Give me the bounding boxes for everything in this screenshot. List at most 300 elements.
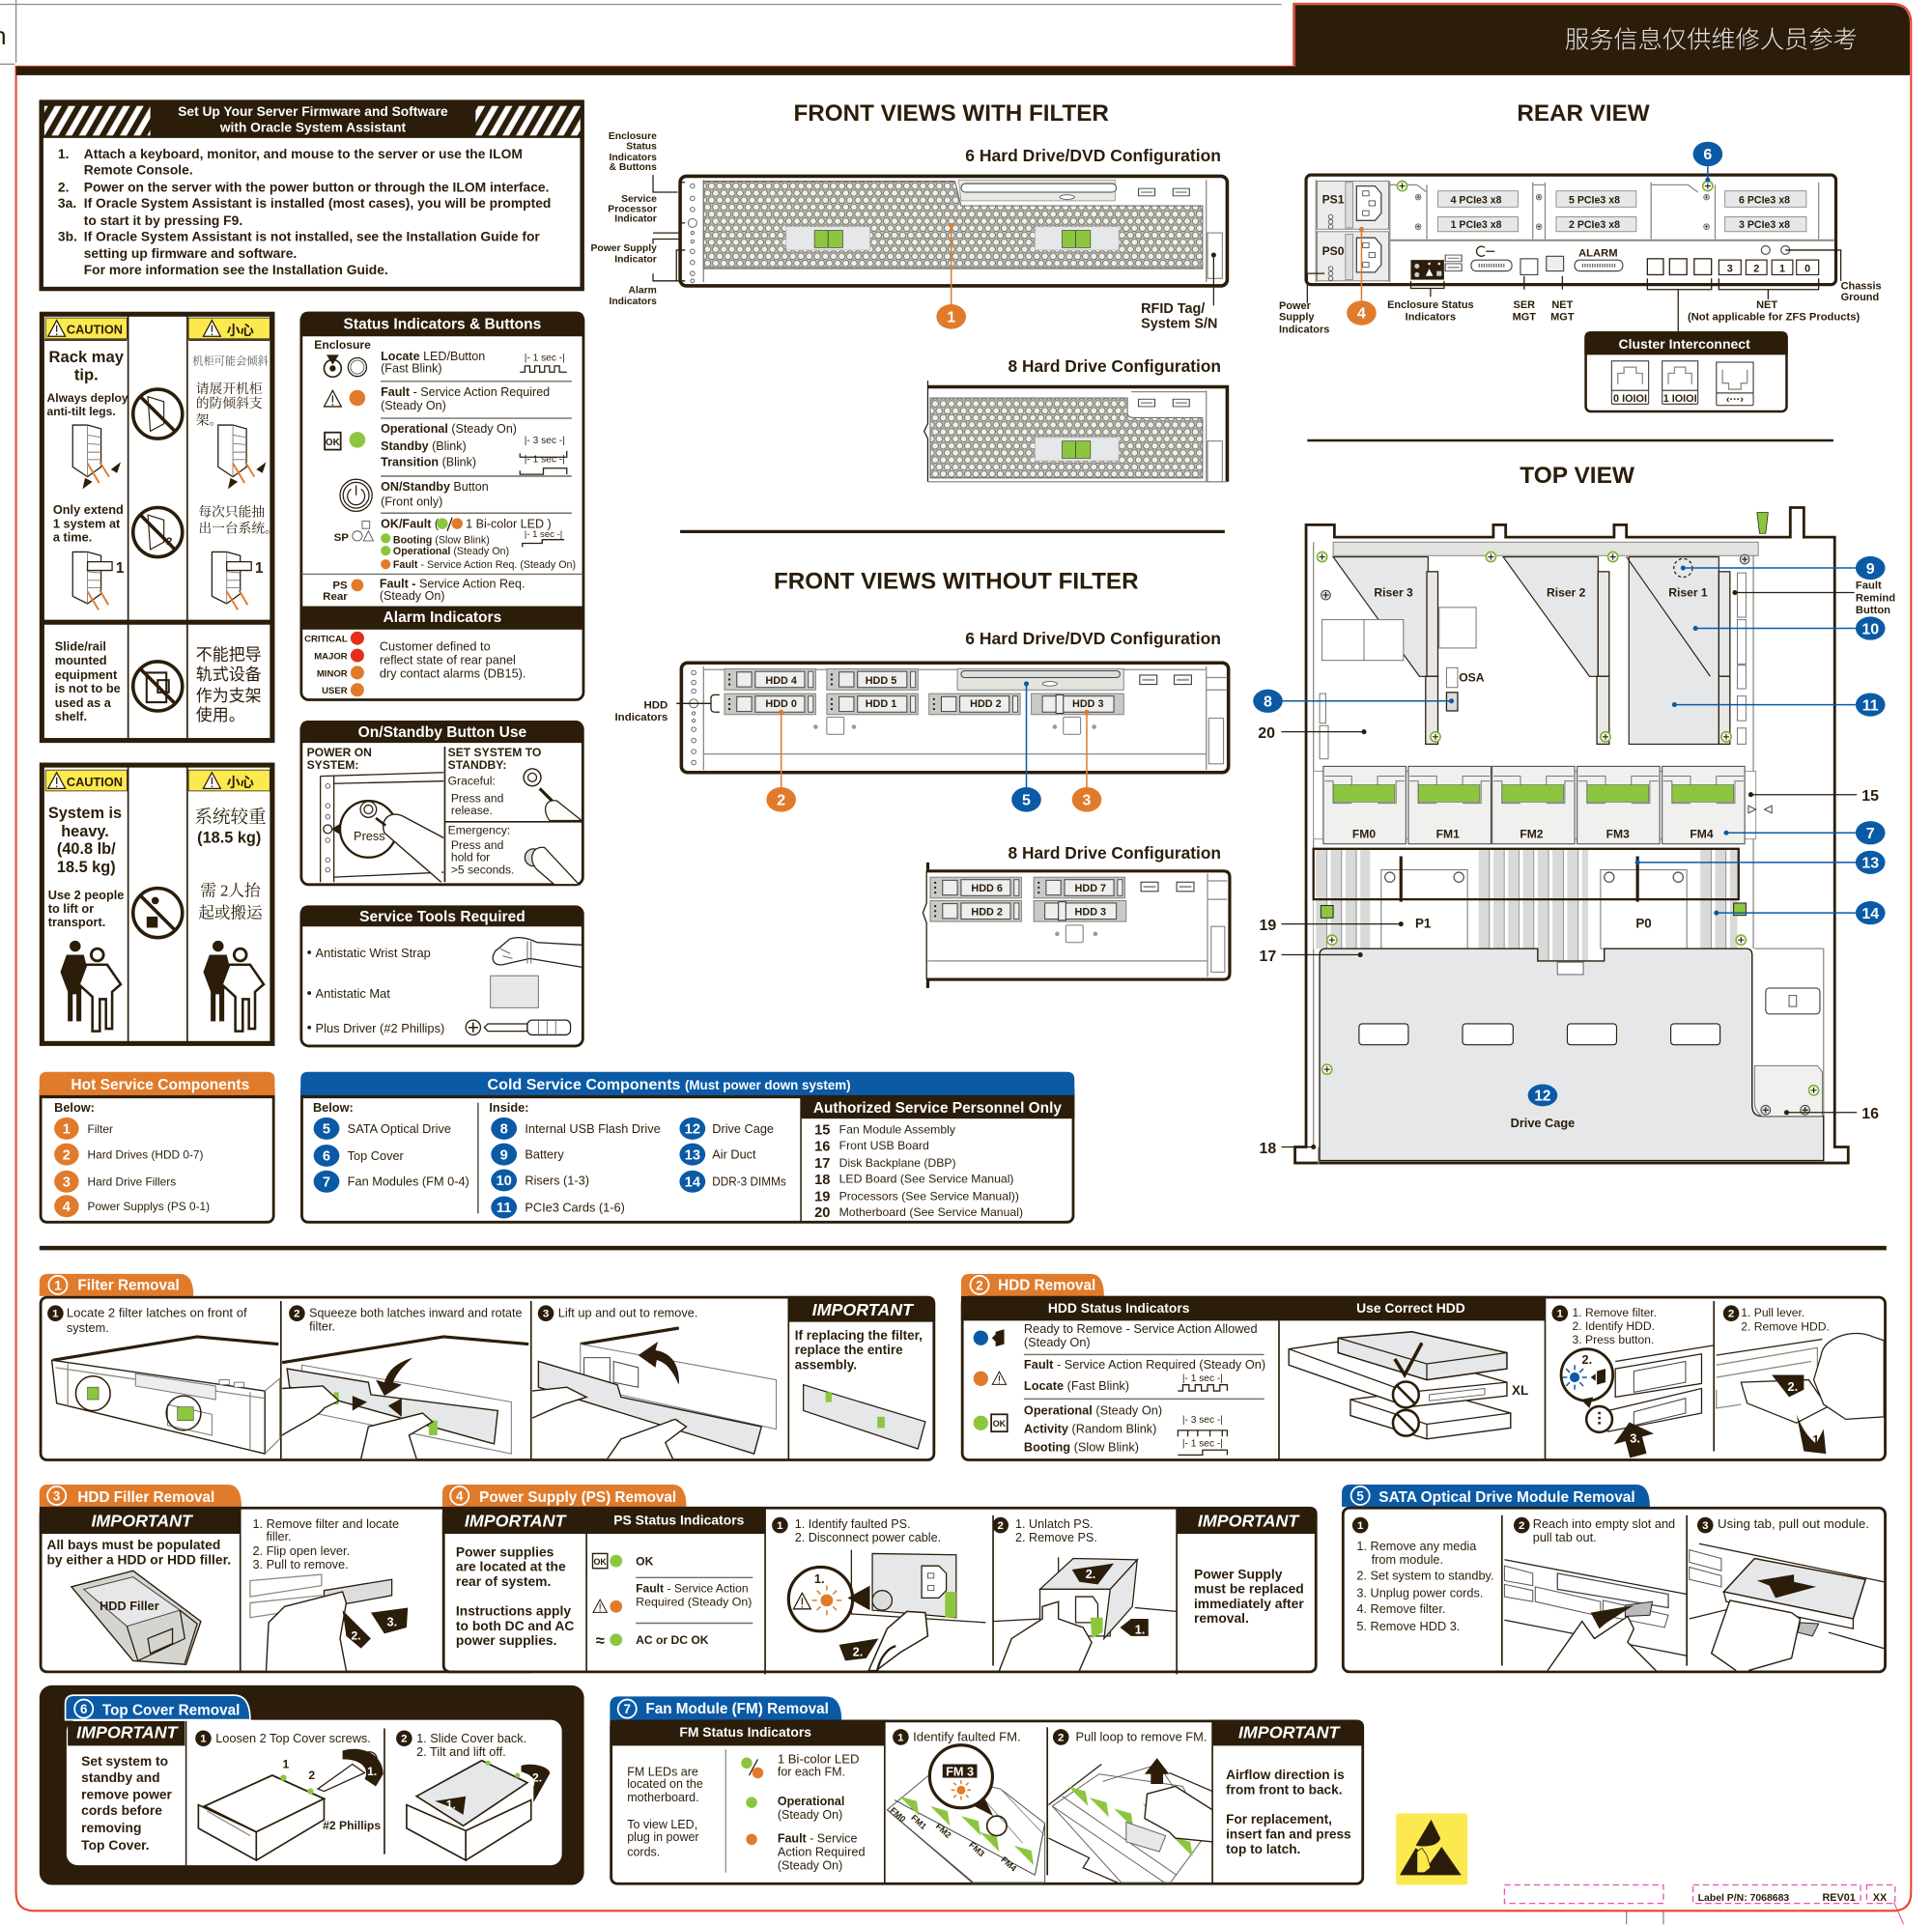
rear io ports: ALARM (1578, 247, 1618, 259)
panel: power supply removal: 1 (777, 1520, 783, 1532)
panel: caution rack tip: used as a (55, 695, 112, 710)
panel: hdd removal: Operational (Steady On) (1024, 1402, 1162, 1417)
panel: hdd filler removal: 3 (53, 1489, 60, 1504)
panel: caution rack tip: Rack may (49, 348, 125, 366)
pcie slots: 6 PCIe3 x8 (1739, 194, 1790, 206)
diagram: front view without filter 6 drive: 5 (1022, 793, 1031, 809)
labels: front panel callouts: Processor (608, 204, 657, 214)
panel: status indicators and buttons: 1 Bi-color LED ) (466, 517, 552, 530)
illustration: faulted fan led: FM4 (999, 1854, 1018, 1873)
panel: fan module removal (610, 1696, 1364, 1883)
panel: hot service components: Hard Drive Fillers (88, 1175, 176, 1189)
panel: hdd removal: |- 3 sec -| (1182, 1415, 1223, 1426)
panel: fan module removal: insert fan and press (1226, 1826, 1351, 1841)
panel: cold service components: 5 (323, 1121, 330, 1137)
panel: on/standby button use: hold for (451, 851, 490, 864)
panel: cold service components: Risers (1-3) (525, 1173, 589, 1187)
panel: filter removal: assembly. (795, 1357, 857, 1372)
panel: status indicators and buttons: Standby (Blink) (381, 439, 467, 453)
illustration: pull filler: 2. (352, 1629, 361, 1643)
panel: sata optical drive removal: Reach into empty slot and (1533, 1516, 1675, 1531)
panel: filter removal: IMPORTANT (812, 1300, 915, 1319)
diagram: front view without filter 8 drive: HDD 3 (1075, 907, 1106, 919)
heading: rear view: REAR VIEW (1517, 100, 1650, 127)
illustration: faulted fan led: FM1 (909, 1813, 928, 1831)
panel: status indicators and buttons: Enclosure (314, 338, 371, 352)
label part number boxes: REV01 (1822, 1892, 1856, 1904)
illustration: loosen top cover screws: 2 (308, 1769, 315, 1782)
illustration: faulted fan led: FM0 (889, 1805, 908, 1824)
panel: setup server firmware: If Oracle System Assistant is installed (most cases), you will be prompted (84, 195, 551, 211)
panel: caution heavy: 需 2人抬 (200, 881, 261, 899)
label: fault remind button: Button (1856, 605, 1890, 616)
diagram: front view without filter 6 drive: 3 (1083, 793, 1092, 809)
illustration: hdd filler tray (71, 1571, 201, 1664)
panel: hdd filler removal: HDD Filler Removal (77, 1489, 214, 1506)
panel: top cover removal: 2. Tilt and lift off. (416, 1744, 506, 1759)
panel: cold service components: 13 (685, 1147, 700, 1163)
labels: rear view callouts: MGT (1513, 312, 1536, 324)
diagram: front view without filter 6 drive: HDD 3 (1072, 698, 1104, 710)
callout badges: top view: 13 (1861, 856, 1879, 872)
illustration: slide cover back: 1. (446, 1798, 456, 1811)
panel: power supply removal: 2. Disconnect power cable. (795, 1531, 941, 1544)
panel: top cover removal (40, 1685, 584, 1885)
panel: filter removal: If replacing the filter, (795, 1328, 923, 1343)
illustration: remove ps: 1. (1135, 1622, 1145, 1636)
panel: caution heavy: (40.8 lb/ (57, 840, 116, 858)
diagram: top view chassis: OSA (1459, 670, 1485, 684)
risers: Riser 1 (1668, 585, 1708, 599)
illustration: identify hdd and pull lever: 1. (1812, 1432, 1823, 1447)
panel: fan module removal: Fault - Service (778, 1831, 858, 1845)
panel: cold service components: 6 (323, 1149, 330, 1165)
panel: top cover removal: remove power (81, 1787, 173, 1802)
panel: fan module removal: motherboard. (627, 1791, 699, 1804)
panel: caution rack tip: mounted (55, 653, 107, 667)
panel: power supply removal: Power Supply (PS) Removal (479, 1489, 676, 1506)
panel: setup server firmware: 1. (58, 146, 69, 161)
panel: fan module removal: For replacement, (1226, 1812, 1332, 1826)
callout badges: top view: 16 (1861, 1106, 1879, 1122)
panel: power supply removal: rear of system. (456, 1573, 551, 1589)
labels: rear view callouts: (Not applicable for ZFS Products) (1688, 312, 1860, 324)
panel: setup server firmware: 2. (58, 179, 69, 194)
panel: sata optical drive removal: 1 (1357, 1520, 1364, 1532)
panel: top cover removal: Top Cover Removal (102, 1703, 240, 1719)
pcie slots: 4 PCIe3 x8 (1451, 194, 1502, 206)
panel: hot service components (40, 1072, 274, 1222)
panel: caution rack tip: 不能把导 (196, 646, 262, 665)
rear io ports: 1 (1779, 263, 1785, 274)
panel: hdd filler removal: by either a HDD or HDD filler. (46, 1551, 231, 1567)
rear io ports: 3 (1727, 263, 1733, 274)
panel: status indicators and buttons: Transition (Blink) (381, 456, 476, 469)
fan modules: FM2 (1520, 827, 1544, 840)
panel: cold service components: Air Duct (712, 1147, 756, 1162)
icon: esd warning (1396, 1814, 1467, 1885)
panel: power supply removal: OK (636, 1554, 654, 1568)
illustration: identify hdd and pull lever: 2. (1788, 1379, 1798, 1394)
panel: hdd removal: 1. Pull lever. (1741, 1306, 1804, 1319)
labels: front panel callouts: & Buttons (610, 162, 657, 173)
panel: top cover removal: Loosen 2 Top Cover screws. (215, 1731, 371, 1745)
panel: top cover removal: 1. Slide Cover back. (416, 1731, 526, 1745)
risers (1333, 557, 1730, 744)
panel: setup server firmware: For more information see the Installation Guide. (84, 262, 388, 277)
illustration: pull loop (1048, 1758, 1212, 1883)
panel: hdd removal: 2 (976, 1278, 983, 1292)
illustration: pull tab (1504, 1560, 1687, 1671)
panel: hot service components: Hard Drives (HDD 0-7) (88, 1148, 204, 1162)
panel: caution rack tip: CAUTION (67, 323, 123, 337)
power supplies: PS0 (1322, 244, 1345, 258)
panel: on/standby button use: Press and (451, 838, 503, 852)
panel: hdd removal: Use Correct HDD (1356, 1300, 1465, 1316)
rear io ports: 0 (1804, 263, 1810, 274)
illustration: loosen top cover screws (198, 1749, 384, 1860)
panel: top cover removal: IMPORTANT (76, 1723, 180, 1742)
panel: power supply removal: Required (Steady On) (636, 1595, 752, 1608)
power supplies: PS1 (1322, 192, 1345, 206)
panel: status indicators and buttons: |- 1 sec -| (525, 454, 565, 465)
panel: filter removal: Lift up and out to remove. (558, 1306, 697, 1320)
panel: fan module removal: located on the (627, 1777, 703, 1791)
illustration: pull out module (1690, 1543, 1884, 1671)
panel: sata optical drive removal: 2 (1519, 1520, 1524, 1532)
panel: caution rack tip: 小心 (227, 323, 254, 338)
illustration: loosen top cover screws: 1 (283, 1757, 290, 1770)
diagram: front view without filter 6 drive (676, 663, 1229, 812)
panel: top cover removal: removing (81, 1820, 141, 1835)
pcie slots: 3 PCIe3 x8 (1739, 219, 1790, 231)
panel: cold service components: LED Board (See Service Manual) (839, 1172, 1014, 1185)
panel: power supply removal: OK (593, 1557, 607, 1567)
fan modules: FM3 (1606, 827, 1630, 840)
rear io ports: 2 (1753, 263, 1759, 274)
fan modules (1314, 766, 1772, 844)
label part number boxes: XX (1873, 1892, 1888, 1904)
panel: caution heavy: 系统较重 (195, 807, 266, 827)
panel: power supply removal: ≈ (596, 1631, 605, 1650)
panel: hdd filler removal: 1. Remove filter and locate (252, 1516, 399, 1531)
panel: status indicators and buttons: Fault - Service Action Req. (Steady On) (393, 559, 576, 571)
panel: caution heavy: to lift or (48, 901, 94, 916)
panel: fan module removal: 2 (1058, 1732, 1064, 1743)
callout badges: top view: 18 (1260, 1141, 1276, 1157)
panel: hdd removal (961, 1274, 1886, 1461)
panel: hot service components: 1 (63, 1121, 71, 1137)
panel: sata optical drive removal (1342, 1485, 1886, 1672)
panel: cold service components: Internal USB Flash Drive (525, 1121, 661, 1136)
panel: status indicators and buttons: USER (322, 686, 348, 696)
labels: front panel callouts (591, 131, 657, 307)
labels: rear view callouts: NET (1551, 299, 1574, 311)
panel: cold service components: 12 (685, 1121, 700, 1137)
panel: fan module removal: IMPORTANT (1238, 1723, 1341, 1742)
panel: hdd removal: 2. Identify HDD. (1573, 1319, 1655, 1333)
illustration: loosen top cover screws: 1. (367, 1765, 377, 1778)
panel: status indicators and buttons: |- 1 sec -| (525, 529, 562, 540)
pcie slots (1390, 182, 1819, 239)
labels: rear view callouts: Chassis (1841, 281, 1882, 293)
panel: power supply removal: PS Status Indicators (613, 1512, 745, 1527)
panel: status indicators and buttons: Alarm Indicators (384, 609, 502, 626)
panel: caution rack tip: shelf. (55, 709, 87, 723)
panel: cold service components: 11 (497, 1201, 511, 1216)
panel: sata optical drive removal: pull tab out. (1533, 1530, 1597, 1544)
header text: service personnel only: 服务信息仅供维修人员参考 (1565, 27, 1858, 54)
diagram: front view without filter 6 drive: HDD 0 (765, 698, 797, 710)
panel: hot service components: Filter (88, 1122, 113, 1136)
panel: filter removal (40, 1274, 935, 1459)
panel: cold service components: Motherboard (See Service Manual) (839, 1205, 1023, 1219)
illustration: step 2 squeeze latches (282, 1337, 528, 1458)
panel: cold service components: 9 (500, 1147, 508, 1163)
panel: sata optical drive removal: 5. Remove HDD 3. (1356, 1619, 1460, 1633)
illustration: slide cover back: 2. (532, 1770, 542, 1784)
panel: status indicators and buttons: PS (332, 580, 348, 592)
panel: hot service components: Hot Service Components (71, 1077, 250, 1093)
panel: caution heavy: (18.5 kg) (197, 829, 261, 846)
panel: on/standby button use: Graceful: (448, 775, 496, 788)
panel: setup server firmware: 3b. (58, 228, 77, 243)
panel: top cover removal: Set system to (81, 1753, 168, 1769)
panel: power supply removal: IMPORTANT (465, 1511, 567, 1530)
panel: fan module removal: Operational (778, 1795, 844, 1808)
panel: hdd removal: Locate (Fast Blink) (1024, 1378, 1129, 1393)
panel: fan module removal: from front to back. (1226, 1783, 1342, 1798)
panel: fan module removal: cords. (627, 1845, 660, 1858)
illustration: remove ps: 2. (1086, 1567, 1095, 1581)
illustration: faulted ps and cable: 2. (853, 1644, 863, 1658)
panel: top cover removal: cords before (81, 1802, 162, 1818)
motherboard components (1320, 573, 1746, 759)
callout leaders (1282, 565, 1857, 1149)
panel: cold service components: 20 (814, 1205, 830, 1221)
panel: fan module removal: top to latch. (1226, 1842, 1300, 1856)
labels: rear view callouts: Power (1279, 300, 1312, 312)
panel: caution rack tip: 架。 (196, 411, 222, 427)
illustration: identify hdd and pull lever: 3. (1630, 1431, 1640, 1446)
panel: hdd filler removal: filler. (267, 1529, 292, 1543)
panel: cold service components: Fan Module Assembly (839, 1122, 956, 1136)
panel: caution rack tip: 机柜可能会倾斜 (192, 354, 269, 368)
panel: fan module removal: (Steady On) (778, 1858, 842, 1872)
panel: status indicators and buttons: Fault - Service Action Required (381, 385, 550, 399)
illustration: remove ps (993, 1557, 1177, 1671)
panel: caution heavy: 18.5 kg) (57, 859, 116, 876)
panel: on/standby button use: Emergency: (448, 824, 510, 837)
panel: hdd filler removal: 3. Pull to remove. (252, 1557, 349, 1571)
panel: on/standby button use: On/Standby Button Use (358, 724, 526, 741)
label part number boxes: Label P/N: 7068683 (1698, 1893, 1789, 1904)
panel: caution rack tip: Always deploy (46, 391, 128, 405)
panel: cold service components: 8 (500, 1121, 508, 1137)
panel: fan module removal: plug in power (627, 1830, 699, 1844)
panel: status indicators and buttons: MINOR (317, 668, 348, 679)
panel: cold service components: Front USB Board (839, 1139, 929, 1152)
panel: setup server firmware: Remote Console. (84, 161, 193, 177)
panel: cold service components: 10 (497, 1174, 512, 1189)
panel: sata optical drive removal: 3 (1702, 1520, 1709, 1532)
illustration: step 3 lift filter (532, 1328, 925, 1458)
panel: status indicators and buttons: (Steady On) (380, 589, 445, 603)
panel: cold service components: Battery (525, 1147, 564, 1162)
panel: status indicators and buttons: |- 1 sec -| (525, 354, 565, 364)
diagram: front view with filter 6 drive (653, 175, 1227, 329)
panel: caution heavy: CAUTION (67, 775, 123, 789)
heading: top view: TOP VIEW (1520, 463, 1635, 489)
callout badges: top view: 14 (1861, 906, 1879, 922)
panel: cold service components: Drive Cage (712, 1121, 774, 1136)
panel: caution rack tip: 请展开机柜 (196, 381, 263, 396)
panel: caution rack tip: tip. (74, 366, 99, 384)
panel: cold service components: Inside: (489, 1100, 528, 1115)
panel: power supply removal: must be replaced (1194, 1581, 1304, 1597)
labels: front panel callouts: Enclosure (609, 131, 657, 142)
panel: service tools required: Service Tools Required (359, 909, 526, 925)
panel: hdd removal: Ready to Remove - Service Action Allowed (1024, 1321, 1258, 1336)
diagram: front view with filter 6 drive: 1 (947, 310, 955, 326)
panel: cluster interconnect: 1 IOIOI (1663, 393, 1697, 405)
panel: cold service components: 15 (814, 1123, 830, 1139)
fan modules: FM4 (1690, 827, 1714, 840)
risers: Riser 3 (1374, 585, 1413, 599)
panel: on/standby button use: POWER ON (307, 746, 372, 759)
panel: top cover removal: 2 (401, 1734, 408, 1745)
panel: cold service components: PCIe3 Cards (1-6) (525, 1200, 625, 1214)
panel: power supply removal: 1. Unlatch PS. (1015, 1517, 1094, 1531)
panel: caution heavy: System is (48, 805, 122, 822)
screws (1318, 552, 1819, 1115)
panel: service tools required (300, 906, 582, 1046)
rear io ports: 6 (1703, 147, 1712, 163)
panel: status indicators and buttons: |- 3 sec -| (525, 436, 565, 446)
callout badges: top view: 17 (1260, 948, 1276, 965)
labels: rear view callouts: Indicators (1406, 312, 1456, 324)
pcie slots: 5 PCIe3 x8 (1569, 194, 1620, 206)
illustration: loosen top cover screws: #2 Phillips (323, 1819, 381, 1832)
callout badges: top view: 20 (1258, 725, 1275, 742)
panel: caution heavy: transport. (48, 915, 105, 929)
panel: power supply removal: are located at the (456, 1559, 566, 1574)
illustration: faulted ps and cable: 1. (814, 1571, 825, 1586)
labels: front panel callouts: Service (621, 194, 657, 205)
panel: setup server firmware: Power on the server with the power button or through the ILOM interface. (84, 179, 549, 194)
panel: setup server firmware: Attach a keyboard, monitor, and mouse to the server or use the ILOM (84, 146, 523, 161)
illustration: faulted fan led: FM3 (967, 1840, 986, 1858)
panel: status indicators and buttons: Fault - Service Action Req. (380, 577, 525, 590)
pcie slots: 1 PCIe3 x8 (1451, 219, 1502, 231)
panel: filter removal: 1 (52, 1309, 59, 1320)
panel: caution rack tip: 每次只能抽 (198, 503, 265, 519)
panel: fan module removal: 1 (897, 1732, 904, 1743)
label: rfid tag: RFID Tag/ (1141, 301, 1205, 317)
panel: hdd removal: Fault - Service Action Required (Steady On) (1024, 1357, 1265, 1372)
panel: on/standby button use: Press (354, 829, 385, 843)
labels: rear view callouts: Supply (1279, 312, 1315, 324)
heading: front views with filter: FRONT VIEWS WITH FILTER (793, 100, 1109, 127)
panel: power supply removal: Power Supply (1194, 1566, 1283, 1581)
panel: filter removal: Locate 2 filter latches on front of (67, 1306, 247, 1320)
panel: caution rack tip: 的防倾斜支 (196, 395, 263, 410)
labels: rear view callouts: MGT (1550, 312, 1575, 324)
subheading: 6 hard drive without filter: 6 Hard Drive/DVD Configuration (965, 629, 1221, 648)
panel: cold service components (300, 1072, 1074, 1222)
panel: cold service components: Top Cover (348, 1148, 405, 1163)
panel: filter removal: replace the entire (795, 1343, 903, 1357)
panel: hot service components: 4 (63, 1200, 71, 1215)
subheading: 8 hard drive with filter: 8 Hard Drive Configuration (1009, 356, 1221, 376)
illustration: step 1 server with latches (52, 1337, 280, 1454)
panel: on/standby button use: STANDBY: (448, 758, 506, 772)
callout badges: top view: 11 (1862, 697, 1879, 714)
panel: caution rack tip (42, 314, 278, 741)
panel: caution rack tip: equipment (55, 667, 118, 682)
panel: caution rack tip: anti-tilt legs. (46, 405, 116, 418)
panel: hdd filler removal: IMPORTANT (91, 1511, 194, 1530)
panel: cold service components: 17 (814, 1156, 830, 1172)
panel: filter removal: 2 (294, 1309, 300, 1320)
panel: setup server firmware: Set Up Your Server Firmware and Software (178, 104, 448, 119)
panel: power supply removal: removal. (1194, 1610, 1249, 1626)
callout badges: top view: 10 (1861, 621, 1879, 637)
labels: rear view callouts: Ground (1841, 292, 1879, 303)
panel: caution rack tip: 出一台系统。 (198, 522, 278, 536)
panel: caution rack tip: Slide/rail (55, 638, 106, 653)
diagram: front view without filter 6 drive: 2 (777, 793, 785, 809)
panel: power supply removal: Instructions apply (456, 1603, 571, 1619)
panel: cold service components: Disk Backplane (DBP) (839, 1156, 956, 1170)
panel: hdd removal: 1. Remove filter. (1573, 1306, 1657, 1319)
label: hdd indicators: HDD (643, 699, 668, 711)
diagram: front view without filter 6 drive: HDD 2 (970, 698, 1002, 710)
panel: sata optical drive removal: 3. Unplug power cords. (1356, 1585, 1483, 1599)
panel: status indicators and buttons: Locate LED/Button (381, 350, 485, 363)
panel: top cover removal: standby and (81, 1769, 160, 1785)
panel: cluster interconnect: 0 IOIOI (1613, 393, 1647, 405)
labels: rear view callouts (1279, 281, 1882, 335)
panel: status indicators and buttons: (Steady On) (381, 399, 446, 412)
panel: status indicators and buttons (300, 312, 584, 699)
label: fault remind button: Remind (1856, 592, 1895, 604)
panel: status indicators and buttons: Operational (Steady On) (381, 422, 517, 436)
panel: caution heavy: heavy. (61, 823, 109, 840)
panel: fan module removal: Airflow direction is (1226, 1768, 1345, 1782)
panel: setup server firmware (40, 99, 584, 289)
diagram: front view without filter 6 drive: HDD 1 (866, 698, 896, 710)
panel: cold service components: 16 (814, 1139, 830, 1154)
label part number boxes (1504, 1885, 1895, 1904)
panel: power supply removal: power supplies. (456, 1632, 556, 1648)
panel: sata optical drive removal: 2. Set system to standby. (1356, 1569, 1494, 1583)
panel: cluster interconnect (1584, 331, 1788, 411)
panel: power supply removal (442, 1485, 1318, 1674)
labels: front panel callouts: Indicators (609, 153, 657, 163)
panel: fan module removal: Identify faulted FM. (913, 1730, 1021, 1744)
air duct and dimms: P0 (1635, 916, 1652, 930)
panel: hot service components: Power Supplys (PS 0-1) (88, 1200, 210, 1213)
illustration: identify hdd and pull lever (1561, 1333, 1884, 1461)
panel: setup server firmware: to start it by pressing F9. (84, 212, 242, 228)
panel: hdd removal: HDD Status Indicators (1048, 1300, 1190, 1316)
panel: status indicators and buttons: Customer defined to (380, 638, 491, 653)
panel: service tools required: Antistatic Wrist Strap (316, 946, 431, 960)
panel: sata optical drive removal: SATA Optical Drive Module Removal (1378, 1489, 1635, 1506)
callout badges: top view: 8 (1264, 694, 1272, 711)
diagram: front view without filter 8 drive: HDD 6 (971, 883, 1003, 894)
